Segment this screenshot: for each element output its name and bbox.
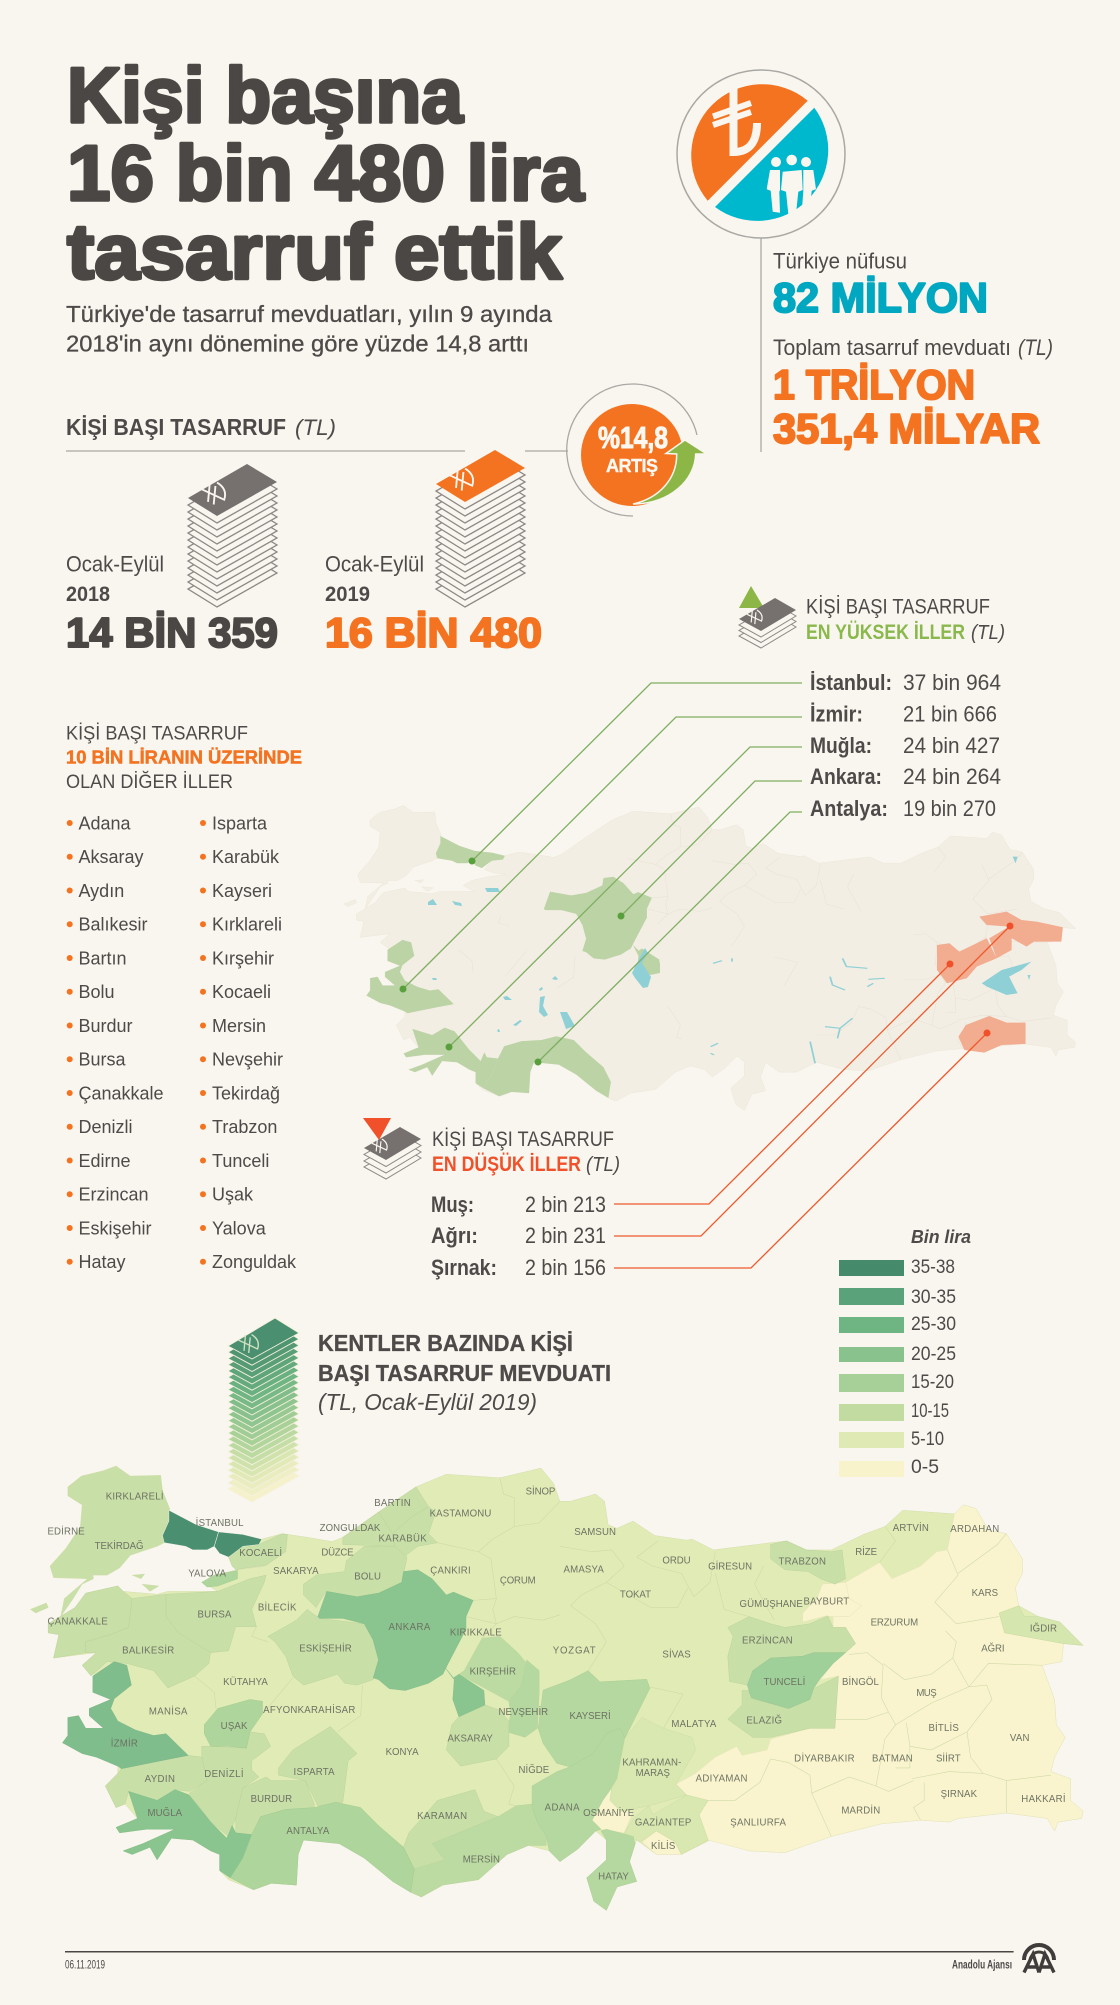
list: provinces column 1: Erzincan [78, 1184, 149, 1204]
callout: 14,8 percent increase: ARTIŞ [606, 456, 658, 476]
province labels west: BALIKESİR [122, 1645, 174, 1656]
heading: provinces above 10 thousand lira: KİŞİ BAŞI TASARRUF [66, 723, 248, 744]
province labels east: SİVAS [662, 1649, 691, 1660]
province labels west: AYDIN [145, 1774, 175, 1785]
list: provinces column 2: Kırşehir [212, 948, 274, 968]
panel: national totals: 351,4 MİLYAR [773, 405, 1040, 452]
province labels east: ŞANLIURFA [730, 1818, 787, 1829]
heading: per capita savings [66, 414, 568, 451]
footer rule [65, 1951, 1014, 1953]
province labels west: KÜTAHYA [223, 1677, 268, 1688]
province labels east: MUŞ [916, 1688, 937, 1699]
province labels east: BİNGÖL [842, 1677, 879, 1688]
province labels west: KARAMAN [417, 1811, 467, 1822]
province labels west: KOCAELİ [239, 1548, 282, 1559]
province labels west: İZMİR [111, 1738, 138, 1749]
stat: 2019: 2019 [325, 583, 370, 606]
province labels east: ARDAHAN [950, 1524, 999, 1535]
province labels east: HATAY [598, 1871, 629, 1882]
province labels east: GAZİANTEP [635, 1818, 691, 1829]
province labels east: MALATYA [671, 1719, 717, 1730]
subtitle: 2018'in aynı dönemine göre yüzde 14,8 arttı [66, 330, 529, 356]
list: provinces column 2: Tunceli [212, 1151, 269, 1171]
heading: per capita savings: KİŞİ BAŞI TASARRUF [66, 414, 286, 440]
province labels west: KIRIKKALE [450, 1628, 502, 1639]
province labels west: ISPARTA [294, 1767, 335, 1778]
list: lowest provinces: 2 bin 213 [525, 1192, 606, 1217]
province labels east: YOZGAT [553, 1646, 596, 1657]
list: highest provinces: İstanbul: [810, 670, 892, 695]
heading: highest provinces: KİŞİ BAŞI TASARRUF [806, 596, 990, 619]
list: provinces column 2: Kayseri [212, 881, 272, 901]
province labels west: BURSA [197, 1609, 232, 1620]
province labels east [545, 1523, 1066, 1882]
province labels east: VAN [1010, 1733, 1030, 1744]
heading: lowest provinces: KİŞİ BAŞI TASARRUF [432, 1128, 614, 1151]
title: Kişi başına [67, 51, 464, 139]
list: provinces column 2: Zonguldak [212, 1252, 297, 1272]
footer date: 06.11.2019 [65, 1960, 105, 1972]
list: provinces column 1: Adana [78, 813, 132, 833]
province labels east: GÜMÜŞHANE [740, 1599, 803, 1610]
province labels west: KASTAMONU [430, 1508, 491, 1519]
list: provinces column 1: Hatay [78, 1252, 126, 1272]
subtitle: Türkiye'de tasarruf mevduatları, yılın 9 ayında [66, 301, 552, 327]
icon: lira and people circle [677, 70, 845, 238]
list: lowest provinces: 2 bin 156 [525, 1255, 606, 1280]
heading: highest provinces: (TL) [971, 622, 1005, 644]
title: tasarruf ettik [67, 208, 563, 296]
province labels west: SİNOP [526, 1486, 555, 1497]
panel: national totals: 1 TRİLYON [773, 361, 975, 408]
list: provinces column 1: Bartın [78, 948, 127, 968]
province labels east: ERZURUM [871, 1618, 918, 1629]
list: provinces column 2: Uşak [212, 1184, 254, 1204]
province labels east: KAYSERİ [570, 1711, 611, 1722]
list: provinces column 2: Karabük [212, 847, 280, 867]
legend: 35-38 [911, 1257, 955, 1278]
list: highest provinces: 24 bin 427 [903, 733, 1000, 758]
province labels west: KIRKLARELİ [106, 1491, 164, 1502]
list: highest provinces: 19 bin 270 [903, 796, 996, 821]
list: provinces column 1: Edirne [78, 1151, 131, 1171]
heading: highest provinces [806, 596, 1005, 644]
province labels east: KARS [972, 1588, 998, 1599]
panel: national totals [761, 238, 1053, 452]
province labels east: IĞDIR [1030, 1623, 1057, 1634]
subtitle [66, 301, 552, 356]
icon: 2018 paper stack [188, 464, 277, 607]
panel: national totals: Toplam tasarruf mevduatı [773, 335, 1011, 360]
province labels east: BAYBURT [803, 1597, 849, 1608]
list: provinces column 1: Denizli [78, 1117, 133, 1137]
heading: province map: (TL, Ocak-Eylül 2019) [318, 1389, 537, 1415]
list: provinces column 2: Kocaeli [212, 982, 271, 1002]
list: highest provinces: İzmir: [810, 702, 863, 727]
list: lowest provinces: Şırnak: [431, 1255, 497, 1280]
heading: province map [318, 1330, 611, 1415]
province labels west: BARTIN [374, 1498, 411, 1509]
province labels west: YALOVA [188, 1569, 227, 1580]
heading: highest provinces: EN YÜKSEK İLLER [806, 621, 965, 644]
stat: 2019: 16 BİN 480 [325, 609, 542, 656]
list: provinces column 1: Balıkesir [78, 914, 148, 934]
province labels west: MERSİN [463, 1855, 500, 1866]
province labels east: BATMAN [872, 1753, 913, 1764]
map: highlighted provinces [344, 806, 1076, 1110]
list: provinces column 2: Isparta [212, 813, 268, 833]
list: provinces column 1: Bolu [78, 982, 115, 1002]
legend: 10-15 [911, 1401, 949, 1422]
province labels east: TOKAT [620, 1589, 651, 1601]
province labels east: TRABZON [778, 1556, 826, 1567]
icon: highest provinces [739, 586, 796, 648]
province labels east: ŞIRNAK [941, 1789, 978, 1800]
province labels east: AĞRI [981, 1644, 1005, 1655]
list: provinces column 2: Trabzon [212, 1117, 277, 1137]
heading: lowest provinces: EN DÜŞÜK İLLER [432, 1153, 581, 1176]
province labels west: SAKARYA [273, 1566, 319, 1577]
province labels east: ADIYAMAN [696, 1773, 747, 1784]
list: provinces column 2: Mersin [212, 1016, 266, 1036]
province labels east: AMASYA [564, 1564, 604, 1575]
province labels west: BOLU [354, 1571, 381, 1582]
heading: lowest provinces [432, 1128, 620, 1176]
list: provinces column 2: Tekirdağ [212, 1083, 280, 1103]
list: provinces column 1: Aydın [78, 881, 124, 901]
province labels east: MARAŞ [636, 1768, 670, 1779]
province labels west: BİLECİK [258, 1602, 297, 1613]
heading: per capita savings: (TL) [295, 415, 336, 440]
list: lowest provinces: 2 bin 231 [525, 1223, 606, 1248]
legend: Bin lira [911, 1227, 971, 1247]
province labels west: DÜZCE [321, 1547, 354, 1558]
icon: 2019 paper stack [436, 450, 525, 607]
province labels west: ESKİŞEHİR [299, 1644, 352, 1655]
province labels east: SAMSUN [574, 1527, 616, 1538]
legend: 15-20 [911, 1372, 954, 1393]
list: highest provinces: Antalya: [810, 796, 888, 821]
callout: 14,8 percent increase [567, 384, 707, 516]
province labels east: DİYARBAKIR [794, 1753, 855, 1764]
map: provinces choropleth [30, 1466, 1083, 1910]
heading: province map: KENTLER BAZINDA KİŞİ [318, 1330, 573, 1356]
province labels west: UŞAK [221, 1721, 248, 1732]
province labels east: ORDU [662, 1556, 691, 1567]
panel: national totals: 82 MİLYON [773, 274, 988, 321]
title: 16 bin 480 lira [67, 129, 585, 217]
panel: national totals: Türkiye nüfusu [773, 248, 907, 274]
province labels west: AFYONKARAHİSAR [263, 1705, 355, 1716]
list: provinces column 1 [67, 813, 164, 1272]
province labels west: İSTANBUL [196, 1518, 244, 1529]
list: provinces column 2: Nevşehir [212, 1050, 283, 1070]
province labels east: ERZİNCAN [742, 1636, 793, 1647]
list: provinces column 1: Burdur [78, 1016, 133, 1036]
list: highest provinces: Ankara: [810, 764, 882, 789]
province labels west [47, 1486, 555, 1866]
province labels west: ÇANKIRI [430, 1565, 471, 1576]
icon: lowest provinces [363, 1118, 421, 1179]
leader lines: highest provinces [400, 683, 802, 1066]
province labels east: KİLİS [651, 1841, 675, 1852]
province labels east: ADANA [545, 1802, 580, 1814]
callout: 14,8 percent increase: %14,8 [598, 420, 668, 455]
legend: 0-5 [911, 1457, 939, 1478]
province labels west: TEKİRDAĞ [95, 1541, 144, 1552]
province labels west: ANTALYA [286, 1826, 330, 1837]
province labels east: SİİRT [936, 1753, 961, 1764]
province labels east: ARTVİN [893, 1523, 929, 1534]
footer source: Anadolu Ajansı [952, 1960, 1012, 1972]
list: provinces column 2 [200, 813, 297, 1272]
list: provinces column 2: Kırklareli [212, 914, 282, 934]
leader lines: lowest provinces [614, 922, 1014, 1268]
eastern provinces 0-5 [592, 1505, 1083, 1854]
list: highest provinces: 21 bin 666 [903, 702, 997, 727]
western and central provinces [48, 1487, 546, 1897]
province labels west: EDİRNE [47, 1526, 85, 1537]
province labels west: AKSARAY [447, 1734, 493, 1745]
province labels west: KONYA [386, 1747, 419, 1758]
list: highest provinces: 37 bin 964 [903, 670, 1001, 695]
province labels west: KIRŞEHİR [470, 1667, 516, 1678]
province labels east: BİTLİS [928, 1723, 959, 1734]
stat: 2018: 2018 [66, 583, 110, 606]
province labels west: ÇANAKKALE [47, 1616, 108, 1628]
province labels east: OSMANİYE [583, 1808, 635, 1819]
province labels east: ELAZIĞ [746, 1716, 782, 1727]
stat: 2019 [325, 552, 542, 656]
title [67, 51, 585, 296]
province labels east: MARDİN [841, 1805, 880, 1816]
legend: 25-30 [911, 1314, 956, 1335]
list: highest provinces [810, 670, 1001, 821]
list: provinces column 1: Aksaray [78, 847, 144, 867]
heading: provinces above 10 thousand lira: OLAN DİĞER İLLER [66, 771, 233, 793]
eastern colored provinces [532, 1541, 1083, 1910]
list: lowest provinces: Muş: [431, 1192, 474, 1217]
province labels east: RİZE [855, 1547, 878, 1558]
list: provinces column 1: Çanakkale [78, 1083, 164, 1103]
list: lowest provinces: Ağrı: [431, 1223, 478, 1248]
stat: 2018: 14 BİN 359 [66, 609, 278, 656]
icon: Anadolu Agency logo [1024, 1945, 1054, 1972]
list: provinces column 1: Bursa [78, 1050, 127, 1070]
list: highest provinces: Muğla: [810, 733, 872, 758]
province labels west: DENİZLİ [204, 1769, 244, 1780]
list: highest provinces: 24 bin 264 [903, 764, 1001, 789]
heading: provinces above 10 thousand lira [66, 723, 302, 793]
province labels east: KAHRAMAN- [622, 1757, 681, 1768]
province labels west: ZONGULDAK [320, 1523, 381, 1534]
list: provinces column 1: Eskişehir [78, 1218, 152, 1238]
province labels east: HAKKARİ [1021, 1794, 1066, 1805]
province labels west: NİĞDE [519, 1765, 550, 1776]
heading: provinces above 10 thousand lira: 10 BİN LİRANIN ÜZERİNDE [66, 746, 302, 767]
icon: gradient paper stack [228, 1318, 299, 1502]
province labels west: KARABÜK [379, 1534, 427, 1545]
list: provinces column 2: Yalova [212, 1218, 267, 1238]
panel: national totals: (TL) [1018, 335, 1053, 360]
legend: 30-35 [911, 1287, 956, 1308]
heading: province map: BAŞI TASARRUF MEVDUATI [318, 1360, 611, 1386]
legend: 5-10 [911, 1429, 944, 1450]
stat: 2018 [66, 552, 278, 656]
heading: lowest provinces: (TL) [586, 1154, 620, 1176]
stat: 2019: Ocak-Eylül [325, 552, 424, 576]
legend: 20-25 [911, 1344, 956, 1365]
province labels west: MUĞLA [147, 1808, 183, 1819]
province labels east: GİRESUN [708, 1562, 752, 1573]
province labels east: TUNCELİ [763, 1677, 805, 1688]
province labels west: NEVŞEHİR [499, 1707, 548, 1718]
province labels west: ANKARA [389, 1622, 431, 1633]
province labels west: BURDUR [251, 1794, 292, 1805]
legend [839, 1227, 971, 1478]
list: lowest provinces [431, 1192, 606, 1280]
province labels west: ÇORUM [500, 1575, 536, 1586]
province labels west: MANİSA [149, 1707, 188, 1718]
stat: 2018: Ocak-Eylül [66, 552, 164, 576]
